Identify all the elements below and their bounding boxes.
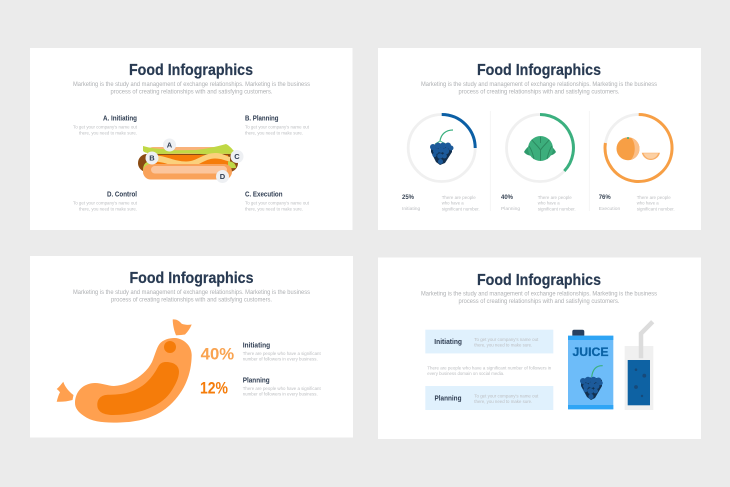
callout: Planning: there, you need to make sure. [474,399,532,405]
text block: C. Execution: C. Execution [245,190,282,198]
text block: Initiating [243,340,321,363]
icon: hot dog [138,138,244,183]
subtitle: hot dog panel: process of creating relationships with and satisfying customers. [110,88,273,96]
text block: Initiating: number of followers in every business. [243,357,318,363]
callout: Planning [425,386,553,410]
subtitle: rings panel: process of creating relationships with and satisfying customers. [458,88,620,96]
title: hot dog panel: Food Infographics [129,62,253,79]
text block: D. Control: To get your company's name out [73,201,138,207]
subtitle: sausage panel: process of creating relationships with and satisfying customers. [111,296,272,304]
text block: Planning [243,375,321,398]
text block: 40%: significant number. [538,206,576,212]
text block: 76%: who have a [637,201,659,207]
subtitle: juice panel: Marketing is the study and management of exchange relationships. Marketing is the business [421,291,657,298]
subtitle: juice panel: process of creating relationships with and satisfying customers. [458,298,620,305]
text block: 25%: 25% [402,195,415,201]
text block: Initiating: Initiating [243,340,270,349]
text block: D. Control: D. Control [107,190,137,198]
icon: juice carton [568,330,613,409]
callout: Planning: Planning [434,394,462,402]
icon: juice carton: JUICE [572,345,608,359]
stat: 40%: 40% [201,345,235,363]
text block: B. Planning: B. Planning [245,114,278,122]
subtitle: sausage panel [73,289,310,304]
callout: Initiating [425,330,553,353]
text block: B. Planning [245,114,310,136]
text block: B. Planning: To get your company's name out [245,124,310,130]
marker: C: C [234,152,240,161]
subtitle: hot dog panel [73,81,310,96]
text block: 40% [501,195,576,212]
text block: D. Control: there, you need to make sure. [79,206,137,212]
text block: C. Execution: there, you need to make sure. [245,206,303,212]
text block: B. Planning: there, you need to make sure. [245,130,303,136]
chart: ring 25% [408,114,475,182]
text block: C. Execution: To get your company's name out [245,201,310,207]
chart: ring 40% [506,114,574,182]
icon: cabbage [524,136,556,161]
marker: B: B [149,154,155,163]
text block: 25%: Initiating [402,206,420,212]
text block: D. Control [73,190,138,212]
text block: middle note [427,365,552,377]
subtitle: juice panel [421,291,657,305]
text block: 40%: Planning [501,206,520,212]
text block: 76% [599,195,675,212]
text block: 76%: Execution [599,206,620,212]
marker: D: D [220,172,226,181]
title: rings panel: Food Infographics [477,62,601,79]
subtitle: rings panel: Marketing is the study and management of exchange relationships. Marketing is the business [421,81,657,88]
callout: Initiating: Initiating [434,337,462,346]
panel: progress rings [378,48,701,230]
panel: juice [378,258,701,439]
text block: A. Initiating: To get your company's name out [73,124,138,130]
text block: middle note: There are people who have a significant number of followers in [427,365,552,371]
text block: 25%: significant number. [442,206,480,212]
text block: Planning: number of followers in every business. [243,392,318,398]
text block: A. Initiating: there, you need to make sure. [79,130,137,136]
icon: sausage [57,319,192,423]
callout: Initiating: To get your company's name out [474,337,539,343]
text block: middle note: every business domain on social media. [427,371,504,377]
text block: 76%: There are people [637,195,671,201]
text block: 25%: who have a [442,201,464,207]
text block: 40%: There are people [538,195,572,201]
text block: 76%: significant number. [637,206,675,212]
stat: 12%: 12% [200,379,228,397]
chart: ring 76% [605,114,672,182]
text block: 25%: There are people [442,195,476,201]
text block: A. Initiating [73,114,138,136]
text block: 25% [402,195,480,212]
subtitle: hot dog panel: Marketing is the study and management of exchange relationships. Marketing is the business [73,81,310,88]
subtitle: rings panel [421,81,657,96]
text block: 76%: 76% [599,195,611,201]
text block: 40%: who have a [538,201,560,207]
text block: 40%: 40% [501,195,514,201]
title: sausage panel: Food Infographics [130,270,254,287]
text block: A. Initiating: A. Initiating [103,114,137,122]
icon: grapes [430,130,454,165]
text block: C. Execution [245,190,310,212]
text block: Initiating: There are people who have a significant [243,351,321,357]
subtitle: sausage panel: Marketing is the study and management of exchange relationships. Marketing is the business [73,289,310,296]
panel: sausage [30,256,353,438]
panel: hot dog [30,48,352,230]
text block: Planning: Planning [243,375,270,384]
text block: Planning: There are people who have a significant [243,386,321,392]
title: juice panel: Food Infographics [477,272,601,289]
callout: Initiating: there, you need to make sure. [474,342,532,348]
callout: Planning: To get your company's name out [474,393,539,399]
icon: juice glass [625,322,653,410]
icon: orange and slice [616,137,660,160]
marker: A: A [167,141,173,150]
